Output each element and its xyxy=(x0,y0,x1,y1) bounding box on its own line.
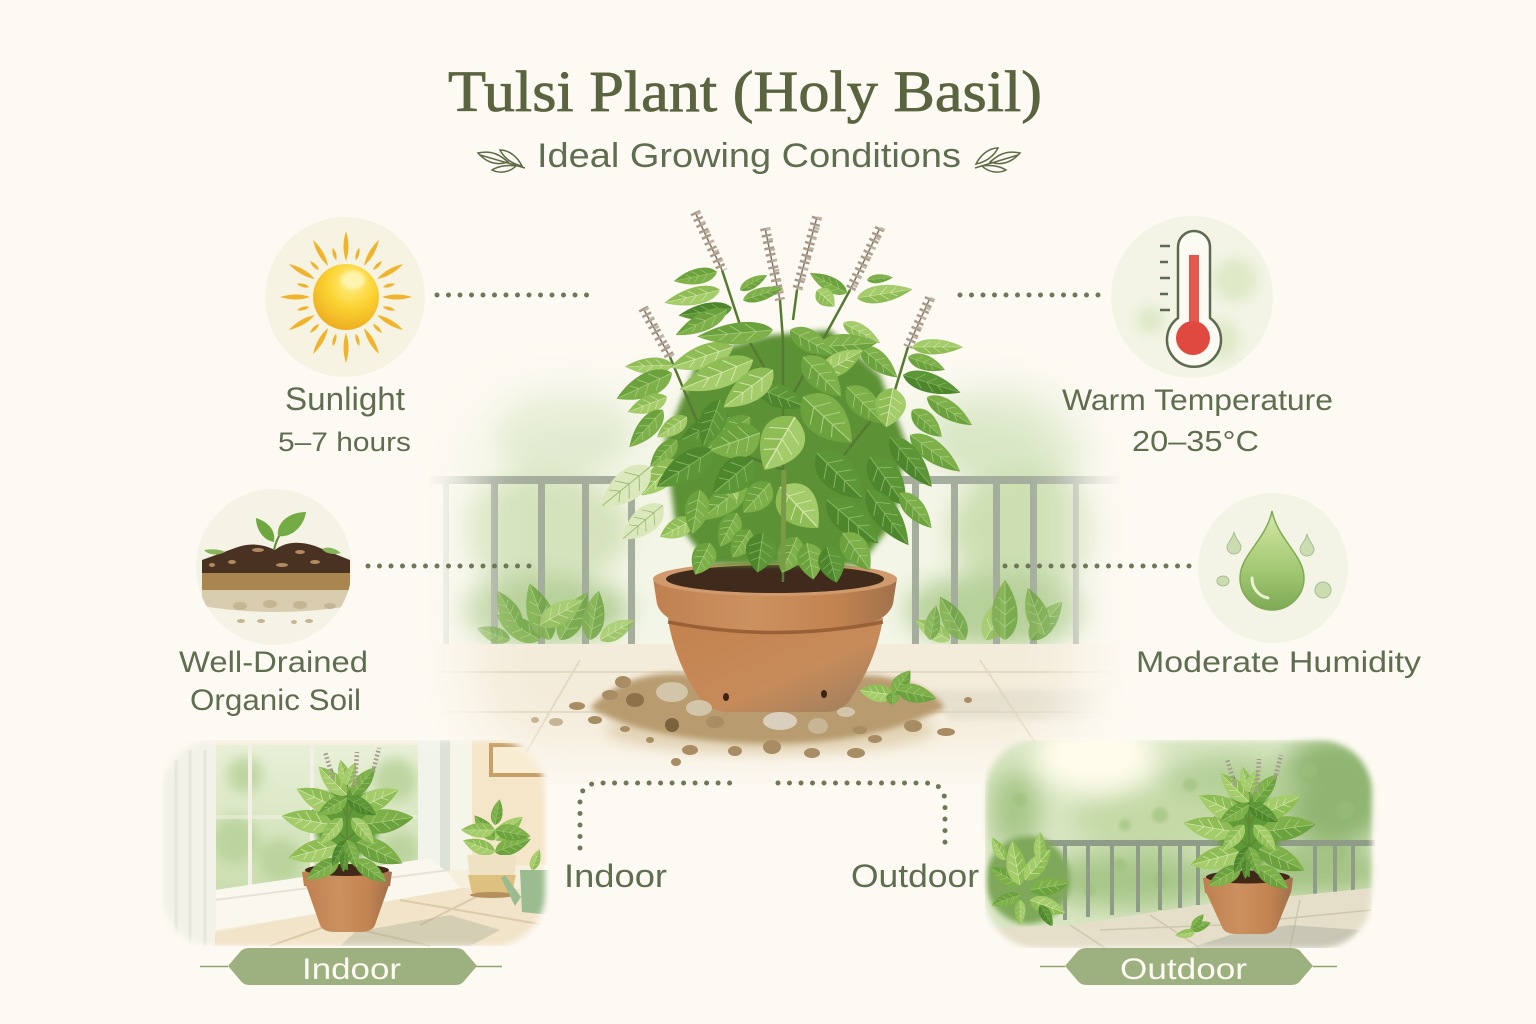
plant leaves front layer xyxy=(685,347,967,586)
connector: temperature xyxy=(960,292,1100,298)
label: soil: Well-Drained xyxy=(179,646,368,679)
main tulsi plant xyxy=(591,212,977,586)
subtitle: Ideal Growing Conditions xyxy=(537,137,961,175)
sill xyxy=(215,858,462,930)
connector: humidity xyxy=(1005,564,1190,568)
terrace floor xyxy=(985,888,1372,948)
foliage bokeh xyxy=(1015,778,1197,896)
right curtain and wall xyxy=(450,740,472,870)
indoor pot xyxy=(302,864,392,932)
window frame xyxy=(212,740,450,893)
label: warm temperature: Warm Temperature xyxy=(1062,384,1333,417)
railing xyxy=(430,476,1120,644)
label: warm temperature xyxy=(1062,384,1333,458)
floor xyxy=(215,888,545,946)
indoor plant xyxy=(280,748,415,888)
outdoor plant xyxy=(1182,755,1317,895)
panel: outdoor scene xyxy=(983,737,1376,948)
blurred foliage xyxy=(990,735,1395,908)
label: soil xyxy=(179,646,368,717)
main terracotta pot xyxy=(653,562,897,712)
label: outdoor: Outdoor xyxy=(851,858,979,894)
icon: soil cross-section xyxy=(196,489,352,645)
flower spikes xyxy=(643,212,933,357)
floor tiles xyxy=(448,644,1102,765)
window glass xyxy=(212,745,427,890)
plant stems xyxy=(670,270,908,582)
foreground bushes xyxy=(477,580,1062,644)
title: Tulsi Plant (Holy Basil) xyxy=(448,59,1042,124)
watering can xyxy=(501,848,550,915)
fallen leaves xyxy=(1175,914,1211,938)
icon: left leaf ornament xyxy=(478,150,525,172)
sun glow xyxy=(1035,717,1155,793)
connector: outdoor xyxy=(778,783,945,848)
railing xyxy=(1040,840,1375,920)
small leaves beside pot xyxy=(858,666,938,707)
label: sunlight: 5–7 hours xyxy=(278,427,411,457)
ribbon: indoor xyxy=(200,948,502,986)
connector: soil xyxy=(368,564,537,568)
second potted plant xyxy=(460,798,533,898)
plant leaves back layer xyxy=(591,265,977,552)
ribbon: outdoor: Outdoor xyxy=(1120,953,1247,986)
label: sunlight: Sunlight xyxy=(285,381,405,417)
ground dirt mound xyxy=(590,673,945,754)
icon: sun xyxy=(265,217,425,377)
icon: water drop xyxy=(1198,493,1348,643)
label: warm temperature: 20–35°C xyxy=(1132,426,1259,458)
label: soil: Organic Soil xyxy=(190,684,361,717)
label: sunlight xyxy=(278,381,411,457)
outdoor pot xyxy=(1203,870,1293,934)
plant main stem front xyxy=(783,470,784,570)
left bush xyxy=(986,832,1071,929)
label: moderate humidity: Moderate Humidity xyxy=(1136,646,1421,679)
ribbon: indoor: Indoor xyxy=(302,953,401,986)
balcony backdrop scene xyxy=(438,377,1112,765)
ribbon: outdoor xyxy=(1040,948,1337,986)
plant foliage mass xyxy=(665,330,905,565)
label: indoor: Indoor xyxy=(564,858,667,894)
wall picture xyxy=(491,745,551,775)
left curtain xyxy=(162,740,216,946)
panel: indoor scene xyxy=(162,740,551,946)
icon: right leaf ornament xyxy=(975,148,1020,172)
connector: indoor xyxy=(580,783,735,848)
connector: sunlight xyxy=(437,292,587,298)
pebbles around pot xyxy=(531,676,972,766)
icon: thermometer xyxy=(1111,216,1273,378)
